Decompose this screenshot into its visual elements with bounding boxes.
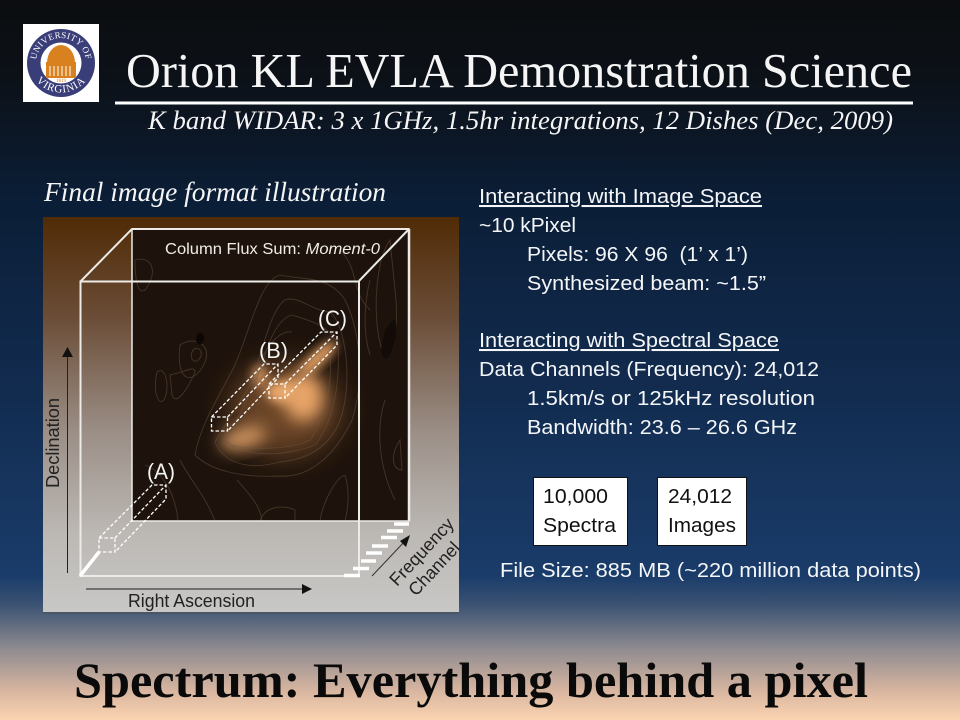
spectrum box C [269, 332, 337, 398]
title underline [115, 102, 913, 104]
arrow: right ascension [86, 584, 312, 594]
text block: spectral space [479, 329, 819, 439]
bottom headline: Spectrum: Everything behind a pixel [74, 652, 868, 708]
icon: University of Virginia seal: 1819 [56, 79, 66, 84]
icon: University of Virginia seal [23, 24, 99, 102]
axis label: declination: Declination [43, 398, 63, 488]
text block: spectral space: 1.5km/s or 125kHz resolution [527, 387, 815, 410]
axis label: frequency: Frequency [385, 514, 458, 590]
callout: images count: Images [668, 514, 736, 537]
figure heading: Final image format illustration [43, 177, 386, 207]
frequency channel ticks [344, 524, 409, 576]
callout: spectra count [534, 478, 628, 546]
corner line to spectrum A [80, 552, 99, 576]
text block: image space: Interacting with Image Space [479, 185, 762, 208]
callout: images count: 24,012 [668, 485, 732, 508]
callout: spectra count: 10,000 [543, 485, 608, 508]
text block: spectral space: Data Channels (Frequency): 24,012 [479, 358, 819, 381]
label: A: (A) [147, 459, 175, 484]
file size note: File Size: 885 MB (~220 million data points) [500, 559, 921, 582]
map caption: Column Flux Sum: Moment-0 [165, 241, 380, 258]
text block: image space: Pixels: 96 X 96 (1’ x 1’) [527, 243, 748, 266]
text block: image space: ~10 kPixel [479, 214, 576, 237]
arrow: declination [62, 347, 73, 573]
spectrum box A [99, 485, 166, 552]
label: B: (B) [259, 338, 288, 363]
panel: data cube illustration [43, 217, 464, 614]
label: C: (C) [318, 306, 347, 331]
text block: spectral space: Bandwidth: 23.6 – 26.6 GHz [527, 416, 797, 439]
text block: image space: Synthesized beam: ~1.5” [527, 272, 766, 295]
callout: spectra count: Spectra [543, 514, 617, 537]
axis label: right ascension: Right Ascension [128, 591, 255, 611]
subtitle: K band WIDAR: 3 x 1GHz, 1.5hr integrations, 12 Dishes (Dec, 2009) [147, 106, 893, 135]
arrow: frequency channel [372, 535, 410, 576]
axis label: channel: Channel [404, 538, 464, 600]
icon: University of Virginia seal: VIRGINIA [38, 76, 86, 92]
text block: spectral space: Interacting with Spectral Space [479, 329, 779, 352]
image: moment-0 map [132, 229, 409, 521]
callout: images count [658, 478, 746, 546]
icon: University of Virginia seal: UNIVERSITY OF [30, 32, 92, 58]
spectrum box B [212, 364, 278, 431]
text block: image space [479, 185, 766, 295]
cube frame [80, 229, 409, 576]
title: Orion KL EVLA Demonstration Science [126, 43, 912, 98]
